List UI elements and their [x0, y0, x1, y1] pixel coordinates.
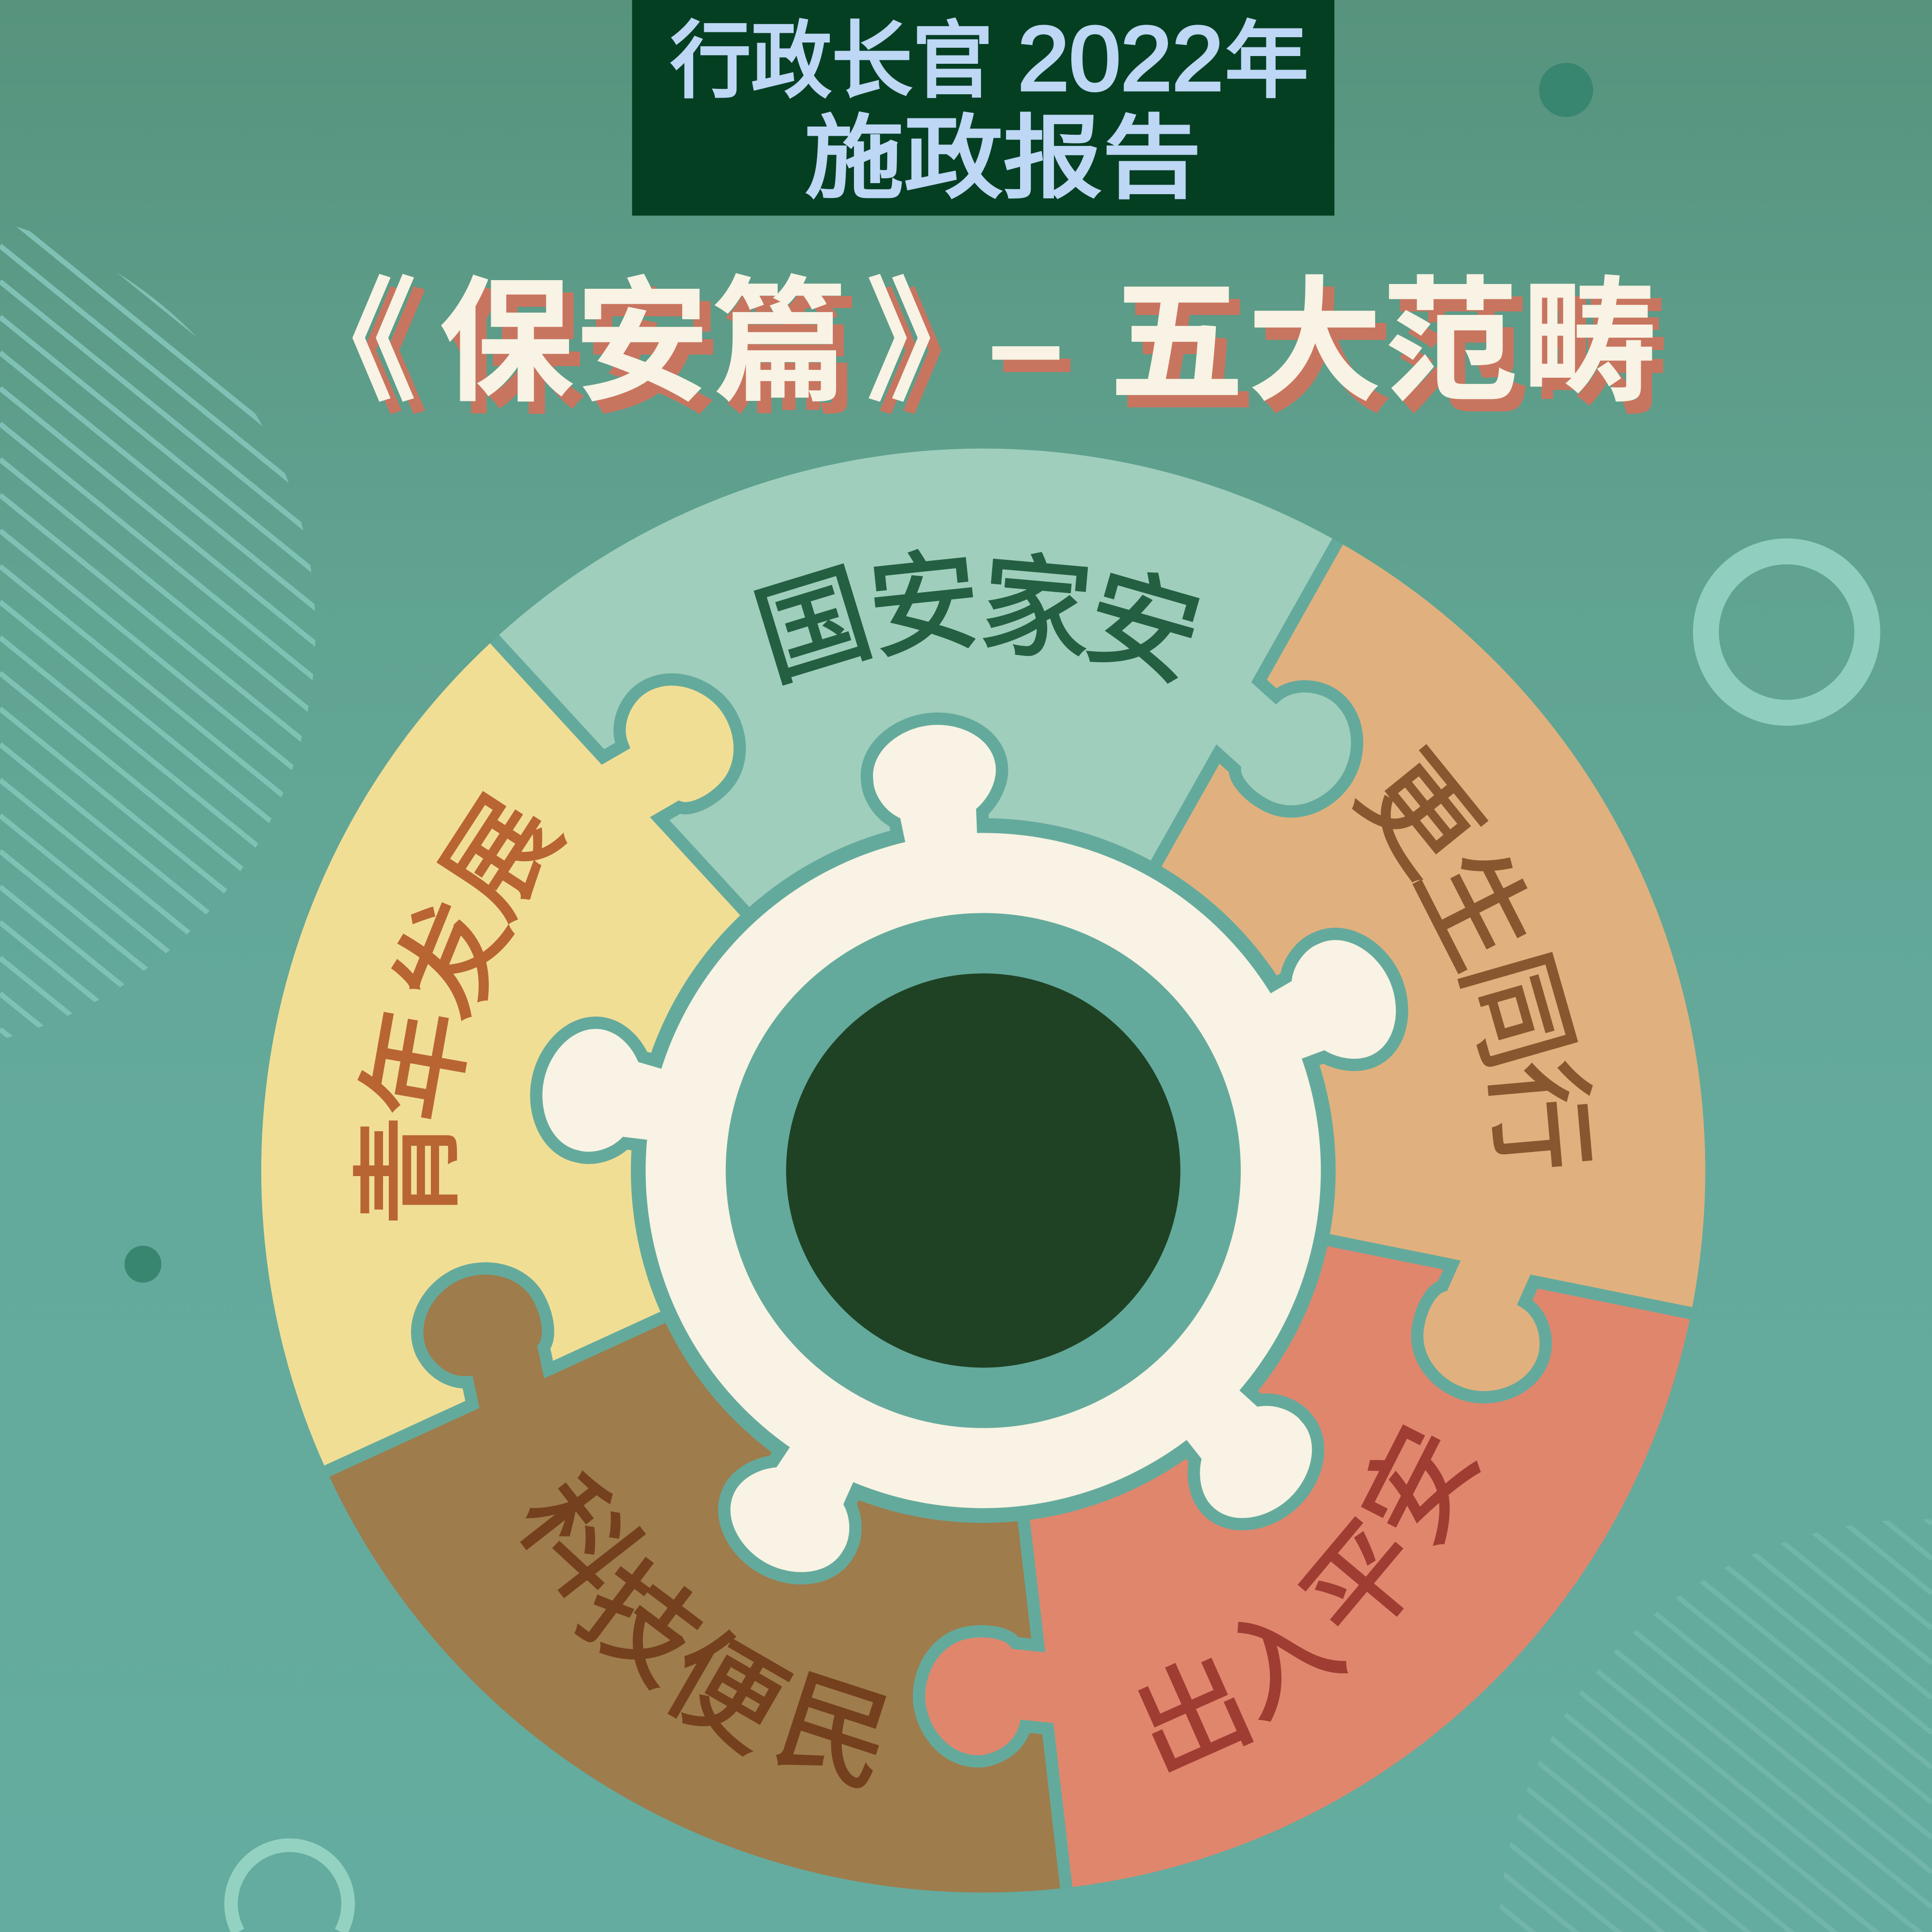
ring: bottom left	[231, 1845, 348, 1932]
tab: brown	[398, 1248, 571, 1421]
striped circle: bottom right	[1500, 1520, 1932, 1932]
label: 出入平安: 安	[1340, 1407, 1501, 1563]
title box line 1: 年	[1225, 14, 1308, 108]
label: 更生同行	[1335, 732, 1606, 1177]
label: 更生同行: 更	[1335, 732, 1502, 896]
piece: 出入平安	[995, 1193, 1755, 1894]
tab: mint	[1201, 656, 1380, 834]
tab: yellow	[581, 654, 766, 839]
label: 更生同行: 生	[1395, 831, 1556, 986]
heading text: 《保安篇》–五大范畴	[282, 267, 1657, 418]
piece: 科技便民	[321, 1213, 1178, 1932]
central gear	[531, 718, 1415, 1593]
label: 国安家安	[742, 537, 1214, 702]
label: 青年发展	[347, 775, 583, 1226]
label: 更生同行: 同	[1442, 940, 1592, 1081]
piece: 更生同行	[1084, 512, 1834, 1314]
label: 青年发展: 展	[419, 775, 583, 936]
ring: top right	[1706, 552, 1867, 713]
label: 科技便民: 科	[495, 1456, 661, 1620]
label: 青年发展: 年	[347, 999, 488, 1130]
label: 青年发展: 青	[347, 1115, 471, 1226]
label: 出入平安: 入	[1202, 1576, 1362, 1740]
dot: left	[125, 1246, 161, 1283]
tab: salmon	[912, 1624, 1058, 1768]
piece: 国安家安	[430, 196, 1341, 1081]
label: 更生同行: 行	[1473, 1056, 1606, 1177]
title box line 1: 行政长官	[670, 14, 993, 108]
label: 科技便民: 技	[560, 1541, 723, 1706]
label: 国安家安: 安	[863, 537, 986, 672]
heading shadow: 《保安篇》–五大范畴	[293, 280, 1668, 431]
label: 出入平安: 平	[1280, 1499, 1447, 1664]
label: 国安家安: 国	[742, 550, 885, 701]
tab: orange	[1406, 1253, 1560, 1408]
label: 科技便民: 便	[646, 1610, 804, 1773]
title box	[632, 0, 1335, 215]
label: 国安家安: 安	[1073, 552, 1214, 702]
label: 出入平安: 出	[1117, 1637, 1269, 1795]
title box line 1: 2022	[1018, 8, 1223, 110]
dot: top right	[1539, 63, 1593, 117]
piece: 青年发展	[0, 635, 914, 1563]
main heading	[282, 267, 1668, 431]
title box line 2: 施政报告	[805, 108, 1201, 210]
label: 科技便民: 民	[763, 1656, 907, 1808]
label: 青年发展: 发	[374, 884, 530, 1034]
striped circle: left	[0, 227, 315, 1038]
label: 国安家安: 家	[976, 542, 1097, 675]
label: 出入平安	[1117, 1407, 1501, 1795]
label: 科技便民	[495, 1456, 907, 1808]
